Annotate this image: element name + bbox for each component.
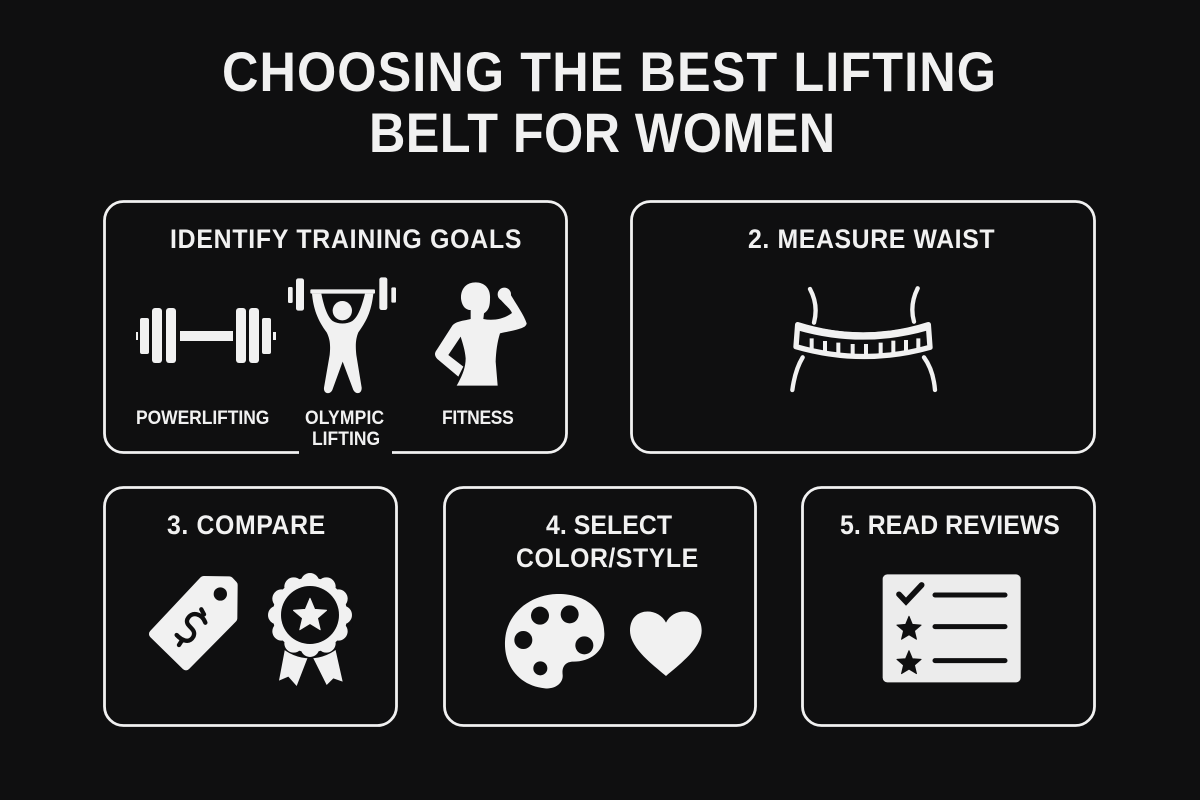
label: powerlifting: POWERLIFTING <box>136 406 269 428</box>
panel: compare <box>104 488 396 726</box>
icon: olympic lifter <box>288 277 396 393</box>
heading: identify training goals: IDENTIFY TRAINING GOALS <box>170 225 521 254</box>
icon: palette <box>505 594 604 688</box>
panel: measure waist <box>632 202 1094 452</box>
label: fitness: FITNESS <box>442 406 514 428</box>
panel: identify training goals <box>104 202 566 457</box>
heading: select color/style: 4. SELECT <box>546 511 672 540</box>
label: olympic lifting <box>305 406 384 449</box>
icon: award rosette <box>267 572 353 686</box>
panel: read reviews <box>802 488 1094 726</box>
heading: compare: 3. COMPARE <box>167 511 325 540</box>
panel: select color and style <box>444 488 756 726</box>
title: CHOOSING THE BEST LIFTING <box>222 42 996 104</box>
heading: select color/style: COLOR/STYLE <box>516 544 698 573</box>
icon: price tag <box>153 580 233 666</box>
title <box>222 42 996 165</box>
icon: fitness woman <box>435 282 527 386</box>
title: BELT FOR WOMEN <box>369 103 835 165</box>
heading: select color/style <box>516 511 698 573</box>
icon: waist with measuring tape <box>792 288 935 390</box>
heading: measure waist: 2. MEASURE WAIST <box>748 225 995 254</box>
label: olympic lifting: LIFTING <box>312 427 380 449</box>
icon: review checklist <box>883 574 1021 682</box>
heading: read reviews: 5. READ REVIEWS <box>840 511 1060 540</box>
label: olympic lifting: OLYMPIC <box>305 406 384 428</box>
icon: heart <box>630 612 702 676</box>
icon: dumbbell <box>136 308 276 363</box>
